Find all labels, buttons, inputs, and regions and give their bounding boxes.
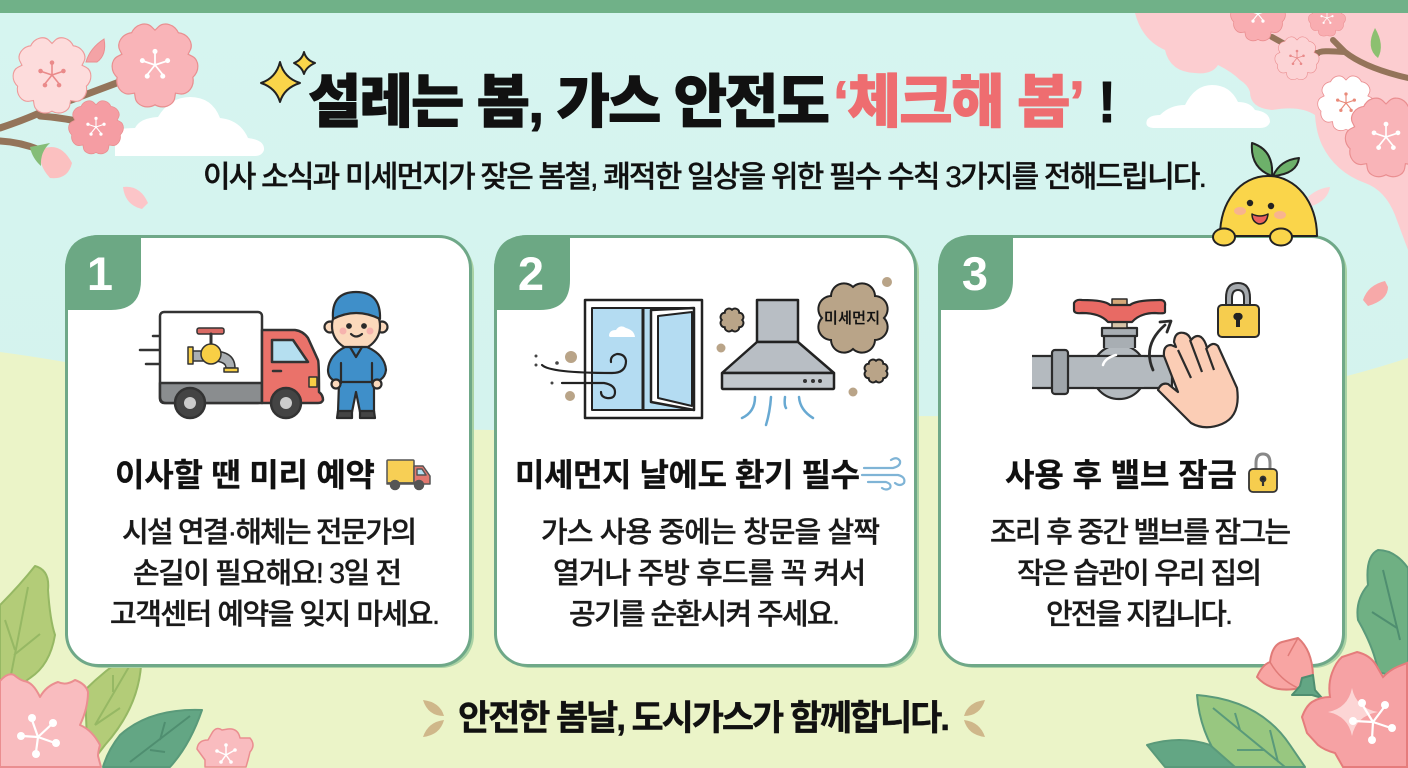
illustration: fine dust clouds: 미세먼지 bbox=[824, 310, 880, 327]
panel 2: ventilation bbox=[494, 235, 919, 668]
bottom left foliage bbox=[0, 566, 253, 767]
body text 1 bbox=[110, 516, 440, 631]
heading 3: 사용 후 밸브 잠금 bbox=[1005, 457, 1237, 493]
illustration: gas technician bbox=[324, 292, 388, 418]
icon: small truck bbox=[387, 460, 430, 490]
cloud right bbox=[1146, 85, 1270, 128]
falling petals bbox=[123, 187, 1388, 306]
body text 3 bbox=[990, 516, 1291, 631]
panel 3: valve bbox=[938, 235, 1347, 668]
title: 설레는 봄, 가스 안전도 bbox=[308, 70, 830, 135]
illustration: open window bbox=[585, 300, 702, 418]
footer decoration right bbox=[964, 700, 985, 737]
body text 3: 조리 후 중간 밸브를 잠그는 bbox=[990, 516, 1291, 549]
sparkle icons bbox=[261, 52, 315, 102]
bottom right foliage bbox=[1147, 550, 1408, 767]
body text 2: 가스 사용 중에는 창문을 살짝 bbox=[541, 516, 880, 549]
illustration: hand bbox=[1158, 333, 1238, 427]
footer message: 안전한 봄날, 도시가스가 함께합니다. bbox=[458, 699, 950, 738]
illustration: fine dust clouds bbox=[716, 277, 892, 396]
cloud left bbox=[115, 97, 264, 156]
spring hills bbox=[0, 352, 1408, 768]
body text 2 bbox=[541, 516, 880, 631]
large blossom bottom left bbox=[0, 674, 101, 767]
number badge 2 bbox=[494, 235, 570, 310]
heading 1: 이사할 땐 미리 예약 bbox=[115, 457, 375, 493]
illustration: range hood bbox=[722, 300, 834, 425]
top bar bbox=[0, 0, 1408, 13]
body text 3: 안전을 지킵니다. bbox=[1046, 598, 1233, 631]
subtitle: 이사 소식과 미세먼지가 잦은 봄철, 쾌적한 일상을 위한 필수 수칙 3가지를 전해드립니다. bbox=[203, 161, 1207, 194]
number badge 1: 1 bbox=[87, 247, 113, 300]
mascot: smiling citrus bbox=[1213, 143, 1317, 246]
number badge 1 bbox=[65, 235, 141, 310]
title bbox=[308, 70, 1116, 135]
number badge 3: 3 bbox=[962, 247, 988, 300]
illustration: gas valve bbox=[1032, 299, 1172, 399]
illustration: padlock bbox=[1218, 283, 1259, 337]
top right blossom cluster bbox=[1135, 0, 1408, 250]
icon: small padlock bbox=[1249, 454, 1277, 492]
small blossom bottom bbox=[197, 729, 253, 767]
number badge 2: 2 bbox=[518, 247, 544, 300]
panel 1: moving reservation bbox=[65, 235, 474, 668]
body text 2: 공기를 순환시켜 주세요. bbox=[569, 598, 840, 631]
body text 1: 손길이 필요해요! 3일 전 bbox=[133, 557, 402, 590]
number badge 3 bbox=[938, 235, 1013, 310]
title: ! bbox=[1098, 70, 1116, 135]
body text 1: 시설 연결·해체는 전문가의 bbox=[122, 516, 417, 549]
big blossom bottom right bbox=[1302, 652, 1407, 767]
icon: wind bbox=[862, 458, 904, 490]
title: ‘체크해 봄’ bbox=[833, 70, 1085, 135]
heading 2: 미세먼지 날에도 환기 필수 bbox=[515, 457, 860, 493]
footer decoration left bbox=[423, 700, 444, 737]
bud near panel 3 bbox=[1257, 638, 1322, 698]
illustration: moving truck bbox=[140, 312, 323, 418]
illustration: wind and particles bbox=[534, 351, 626, 401]
top left branch with blossoms bbox=[0, 25, 201, 178]
body text 1: 고객센터 예약을 잊지 마세요. bbox=[110, 598, 440, 631]
body text 2: 열거나 주방 후드를 꼭 켜서 bbox=[553, 557, 866, 590]
body text 3: 작은 습관이 우리 집의 bbox=[1017, 557, 1262, 590]
